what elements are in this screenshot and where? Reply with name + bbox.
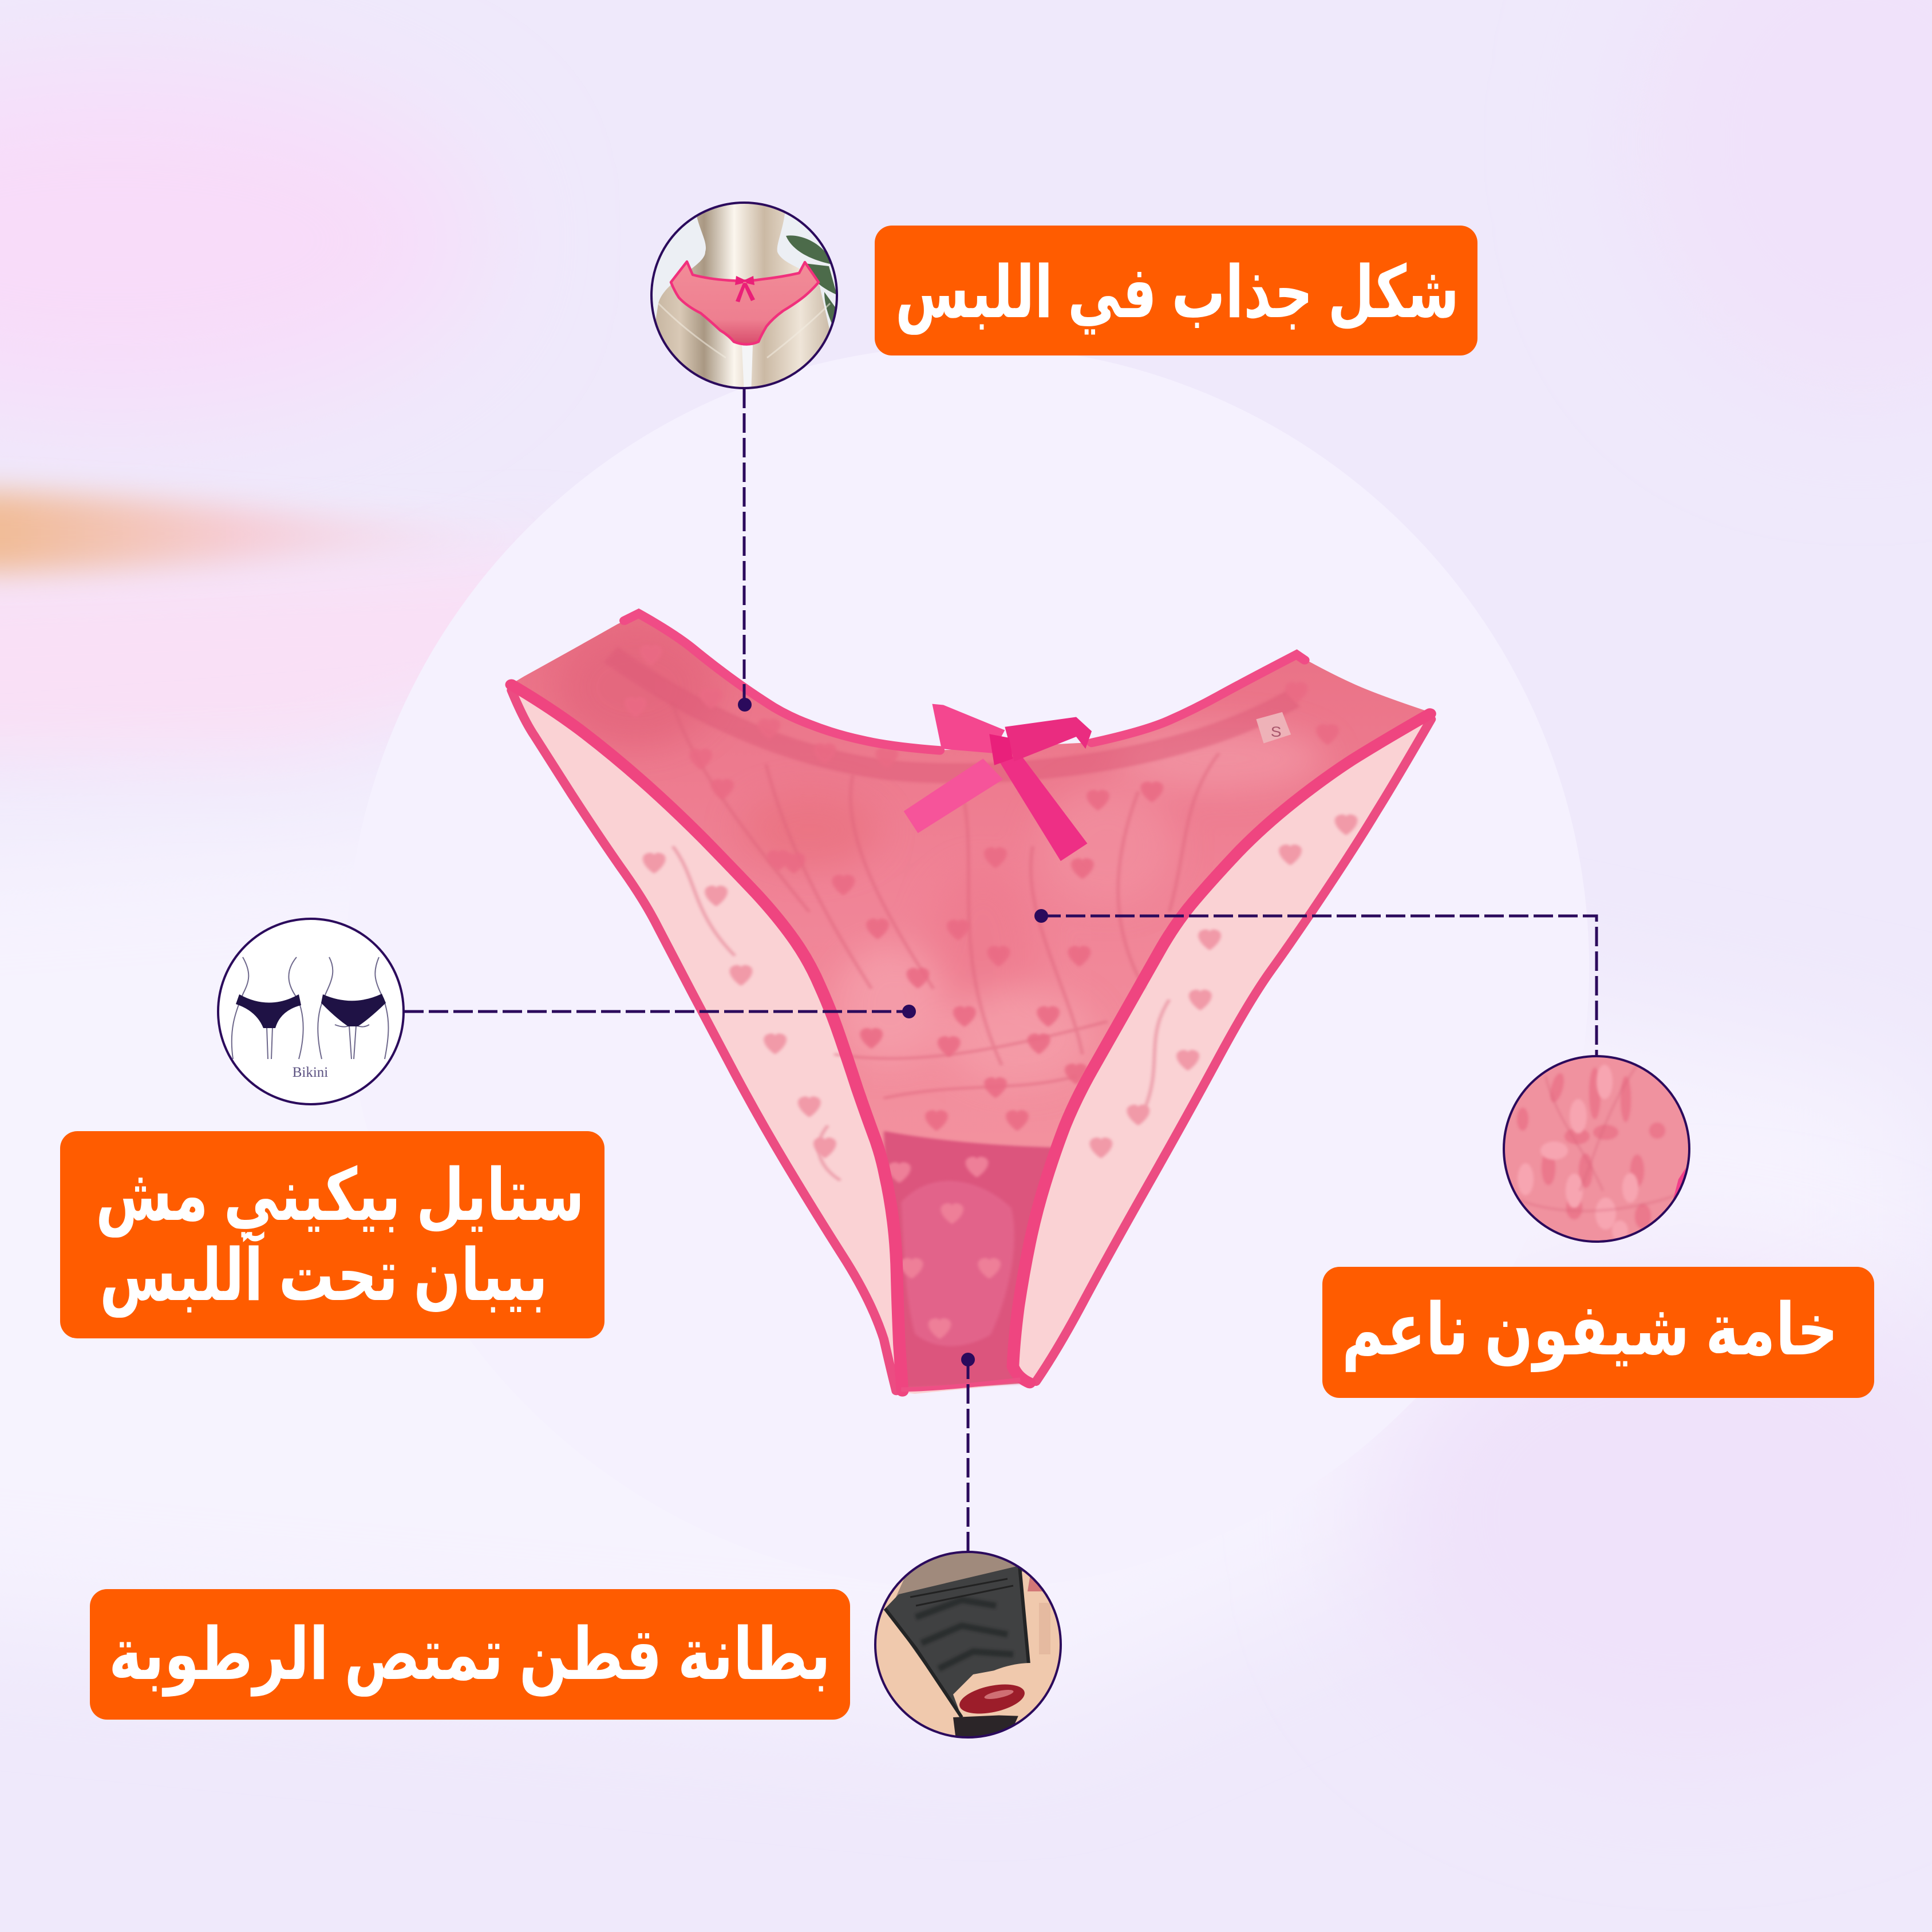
label: bottom — [90, 1589, 850, 1720]
inner leg bands — [511, 685, 1430, 1391]
gusset hem — [901, 1380, 1020, 1389]
icon circle: chiffon fabric close-up — [1500, 1053, 1694, 1248]
fabric folds — [673, 704, 1219, 1180]
size tag: S — [1271, 724, 1282, 740]
gusset hearts — [888, 1157, 1001, 1339]
bikini caption: Bikini — [293, 1065, 328, 1080]
label: top — [875, 226, 1477, 355]
outer leg bands — [511, 690, 1431, 1391]
callout line: left — [404, 1010, 909, 1013]
callout dot: bottom — [961, 1353, 975, 1366]
callout dot: left — [902, 1005, 916, 1018]
label: left: بيبان تحت آللبس — [100, 1231, 548, 1317]
callout dot: right — [1034, 909, 1048, 923]
rear layer silhouette — [510, 614, 1433, 1394]
icon circle: bikini style diagram — [218, 919, 404, 1104]
callout dot: top — [738, 698, 752, 712]
label: left: ستايل بيكيني مش — [96, 1155, 584, 1238]
mottled fabric tone — [555, 627, 1325, 1087]
label: left — [60, 1131, 605, 1338]
front panel — [510, 614, 1430, 1391]
cotton gusset — [884, 1131, 1054, 1388]
large pale circle behind product — [346, 346, 1589, 1589]
bow — [904, 704, 1092, 861]
callout line: bottom — [966, 1360, 970, 1551]
size tag — [1256, 712, 1291, 743]
heart dots — [624, 645, 1339, 1131]
label: right — [1322, 1267, 1874, 1398]
icon circle: worn look on mannequin — [644, 200, 844, 395]
waistband — [625, 614, 1305, 750]
side panel hearts — [643, 815, 1357, 1159]
icon circle: black cotton lining close-up — [873, 1548, 1065, 1740]
label: bottom: بطانة قطن تمتص الرطوبة — [109, 1614, 831, 1697]
callout line: top — [743, 389, 745, 705]
product: pink mesh garment — [510, 614, 1433, 1394]
bikini outlines — [232, 957, 388, 1059]
label: top: شكل جذاب في اللبس — [895, 252, 1459, 335]
callout line: right — [1041, 916, 1597, 1056]
